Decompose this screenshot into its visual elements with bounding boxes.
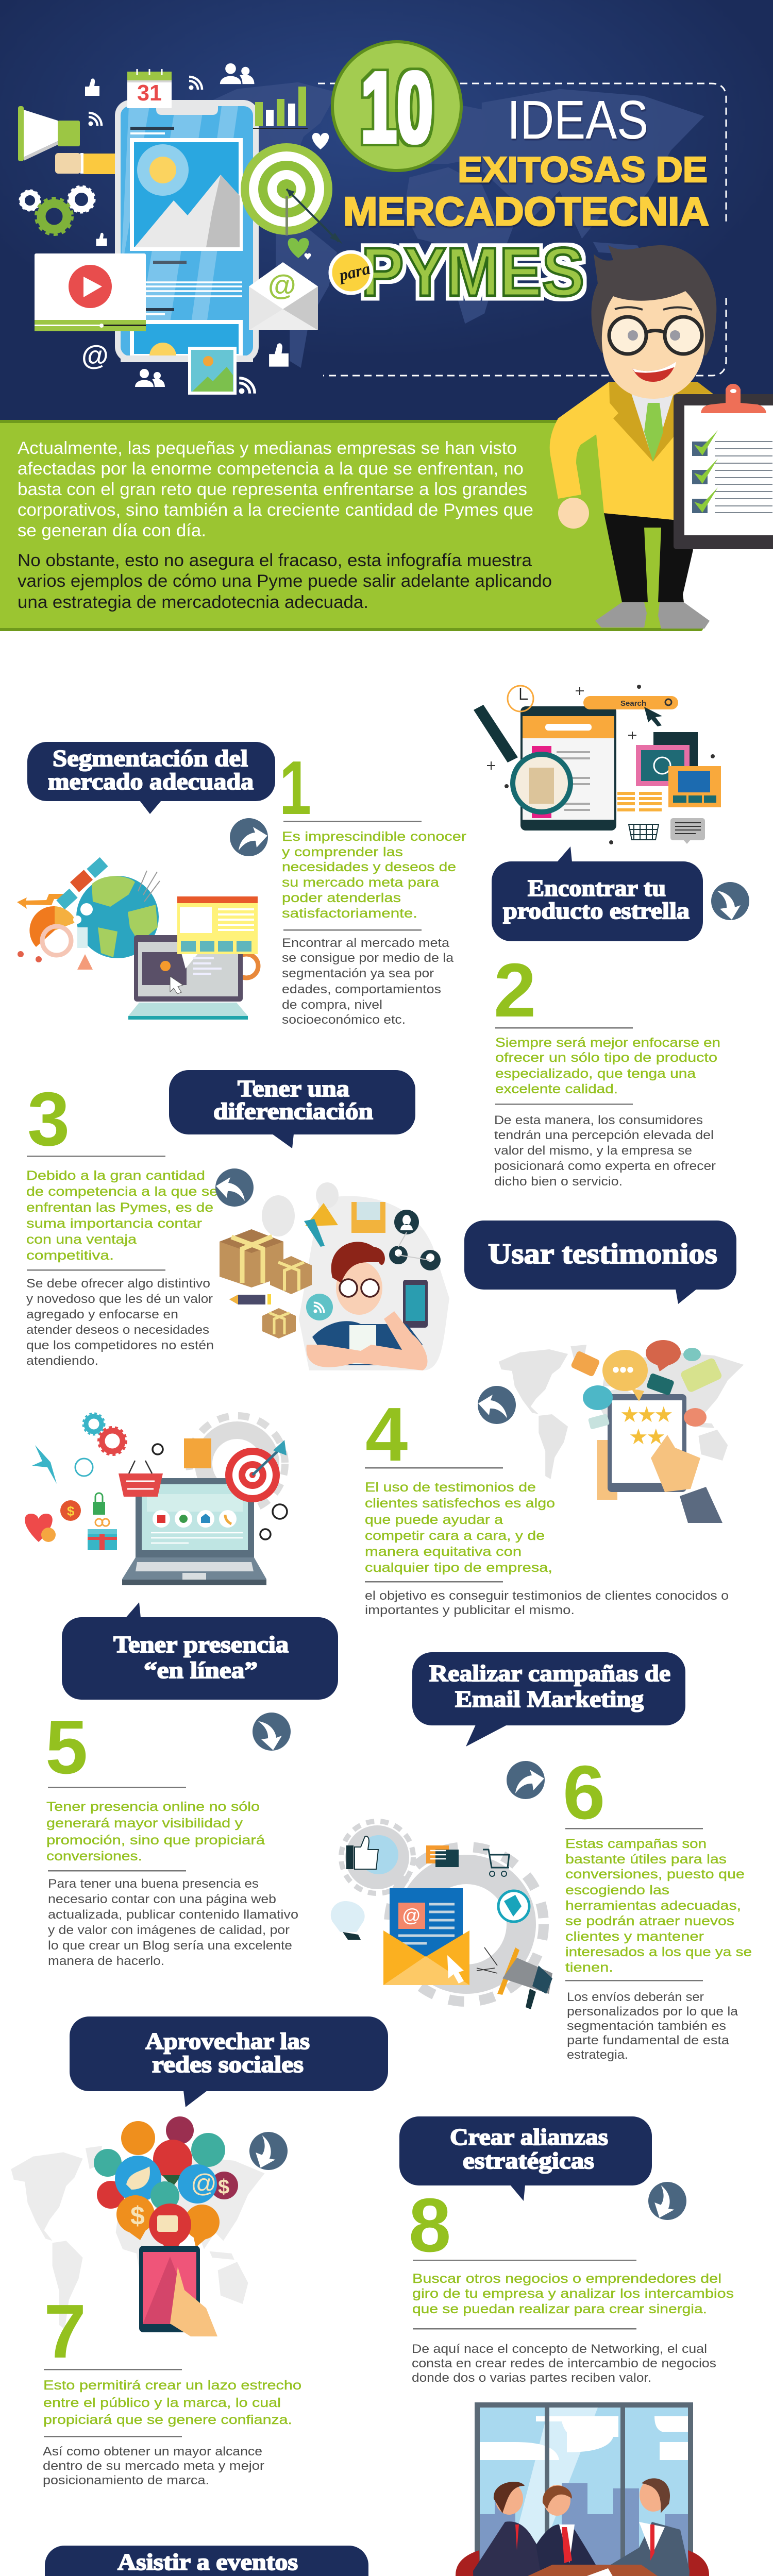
highlight text: suma importancia contar <box>26 1216 202 1231</box>
highlight text: y comprender las <box>282 845 403 859</box>
body text: que los competidores no estén <box>26 1338 214 1352</box>
number: 7 <box>44 2289 86 2374</box>
arrow <box>711 882 749 920</box>
highlight text: conversiones. <box>46 1849 142 1863</box>
panel: intro <box>0 420 708 631</box>
icon: smartphone <box>115 100 259 362</box>
body text: posicionará como experta en ofrecer <box>494 1159 716 1173</box>
highlight text: El uso de testimonios de <box>365 1480 536 1495</box>
section 5: presencia en linea <box>45 1602 338 1968</box>
highlight text <box>365 1480 555 1575</box>
world map background <box>192 72 704 368</box>
speech bubble: Tener una <box>238 1075 349 1101</box>
body text: se consigue por medio de la <box>282 951 454 965</box>
illustration: social bubbles and tablet: $ <box>218 2176 229 2198</box>
highlight text: escogiendo las <box>565 1883 669 1897</box>
icon: gears <box>20 187 94 234</box>
speech bubble: Crear alianzas <box>450 2124 608 2150</box>
arrow <box>253 1713 291 1751</box>
speech bubble: Usar testimonios <box>488 1238 717 1270</box>
icon: calendar: 31 <box>137 80 162 106</box>
speech bubble <box>70 2016 388 2107</box>
character: man with clipboard <box>550 245 773 629</box>
body text: Para tener una buena presencia es <box>48 1877 259 1891</box>
body text: dentro de su mercado meta y mejor <box>43 2459 264 2473</box>
illustration: email with gears and megaphone: @ <box>402 1905 421 1926</box>
highlight text: manera equitativa con <box>365 1545 522 1559</box>
body text: posicionamiento de marca. <box>43 2473 209 2487</box>
illustration: email with gears and megaphone <box>331 1821 552 2009</box>
highlight text: interesados a los que ya se <box>565 1945 752 1959</box>
body text: valor del mismo, y la empresa se <box>494 1144 692 1158</box>
intro paragraph 1: Actualmente, las pequeñas y medianas empresas se han visto <box>18 438 517 458</box>
illustration: social bubbles and tablet: $ <box>130 2201 145 2230</box>
speech bubble: producto estrella <box>503 897 690 924</box>
icons: social small <box>81 63 289 394</box>
illustration: world map, tablet and chat bubbles: ★ <box>637 1402 657 1427</box>
intro paragraph 2: varios ejemplos de cómo una Pyme puede salir adelante aplicando <box>18 571 552 591</box>
illustration: tablet and magnifier: Search <box>620 699 646 708</box>
body text <box>365 1589 729 1617</box>
body text: importantes y publicitar el mismo. <box>365 1603 575 1617</box>
header panel <box>0 0 773 422</box>
highlight text: que se puedan realizar para crear sinergia. <box>412 2302 707 2316</box>
illustration: laptop with marketing icons: $ <box>67 1503 75 1519</box>
title: mercadotecnia: MERCADOTECNIA <box>343 189 709 234</box>
highlight text: promoción, sino que propiciará <box>46 1833 265 1848</box>
illustration: world map, tablet and chat bubbles: ★ <box>620 1402 640 1427</box>
highlight text: Debido a la gran cantidad <box>26 1168 205 1183</box>
highlight text: su mercado meta para <box>282 875 439 890</box>
body text: atendiendo. <box>26 1354 98 1368</box>
highlight text: giro de tu empresa y analizar los intercambios <box>412 2286 734 2301</box>
highlight text: Esto permitirá crear un lazo estrecho <box>43 2378 301 2393</box>
section 4: testimonios <box>365 1221 744 1617</box>
section 7: redes sociales <box>11 2016 388 2487</box>
highlight text: herramientas adecuadas, <box>565 1899 741 1913</box>
body text: lo que crear un Blog sería una excelente <box>48 1939 292 1953</box>
body text: Los envíos deberán ser <box>567 1990 704 2004</box>
body text: edades, comportamientos <box>282 982 441 996</box>
highlight text: enfrentan las Pymes, es de <box>26 1200 213 1215</box>
body text <box>282 936 454 1027</box>
number: 6 <box>563 1750 605 1835</box>
illustration: tablet and magnifier <box>474 685 721 844</box>
highlight text: especializado, que tenga una <box>495 1066 696 1081</box>
body text <box>48 1877 298 1968</box>
highlight text: cualquier tipo de empresa, <box>365 1561 552 1575</box>
speech bubble <box>412 1652 685 1747</box>
highlight text: Estas campañas son <box>565 1837 707 1851</box>
illustration: world map, tablet and chat bubbles: ••• <box>612 1359 634 1381</box>
body text: agregado y enfocarse en <box>26 1308 178 1321</box>
speech bubble: Email Marketing <box>455 1686 644 1712</box>
number: 2 <box>494 948 536 1033</box>
icon: bar chart <box>253 87 308 129</box>
highlight text: satisfactoriamente. <box>282 906 417 921</box>
highlight text: conversiones, puesto que <box>565 1867 745 1882</box>
speech bubble: Asistir a eventos <box>117 2549 298 2575</box>
body text: Encontrar al mercado meta <box>282 936 450 950</box>
highlight text <box>26 1168 218 1263</box>
highlight text <box>46 1800 265 1863</box>
body text: el objetivo es conseguir testimonios de clientes conocidos o <box>365 1589 729 1603</box>
section 2: producto estrella <box>474 685 749 1189</box>
arrow <box>215 1168 254 1207</box>
speech bubble: estratégicas <box>463 2147 594 2174</box>
title: exitosas de: EXITOSAS DE <box>458 149 708 190</box>
illustration: social bubbles and tablet <box>11 2116 265 2336</box>
speech bubble <box>62 1602 338 1700</box>
body text: De aquí nace el concepto de Networking, el cual <box>412 2342 707 2356</box>
speech bubble <box>27 742 275 814</box>
highlight text: se podrán atraer nuevos <box>565 1914 734 1928</box>
highlight text: Tener presencia online no sólo <box>46 1800 260 1814</box>
highlight text: Es imprescindible conocer <box>282 829 466 844</box>
intro paragraph 2: una estrategia de mercadotecnia adecuada. <box>18 592 368 612</box>
icon: picture <box>188 347 237 395</box>
number: 1 <box>279 745 311 831</box>
body text <box>26 1277 214 1368</box>
body text <box>494 1113 716 1189</box>
highlight text: tienen. <box>565 1960 613 1975</box>
body text: dicho bien o servicio. <box>494 1175 623 1189</box>
title circle with 10 <box>332 42 461 171</box>
highlight text: entre el público y la marca, lo cual <box>43 2396 281 2410</box>
body text: parte fundamental de esta <box>567 2033 730 2047</box>
arrow <box>478 1386 516 1424</box>
icon: megaphone with hand <box>18 106 115 174</box>
highlight text: competir cara a cara, y de <box>365 1529 545 1543</box>
highlight text: necesidades y deseos de <box>282 860 456 874</box>
speech bubble: diferenciación <box>213 1098 373 1124</box>
highlight text: Buscar otros negocios o emprendedores del <box>412 2272 721 2286</box>
icon: calendar <box>127 69 172 108</box>
section 6: email marketing <box>331 1652 752 2062</box>
illustration: social bubbles and tablet: @ <box>191 2169 217 2198</box>
highlight text: clientes y mantener <box>565 1929 704 1944</box>
body text: actualizada, publicar contenido llamativo <box>48 1908 298 1922</box>
number: 5 <box>45 1705 88 1790</box>
body text: tendrán una percepción elevada del <box>494 1128 714 1142</box>
highlight text: con una ventaja <box>26 1232 137 1247</box>
highlight text: bastante útiles para las <box>565 1852 727 1867</box>
body text: Así como obtener un mayor alcance <box>43 2445 262 2459</box>
dashed frame <box>318 83 726 376</box>
highlight text <box>412 2272 734 2316</box>
section 8: alianzas <box>399 2116 734 2576</box>
body text: y novedoso que les dé un valor <box>26 1292 213 1306</box>
body text: De esta manera, los consumidores <box>494 1113 703 1127</box>
speech bubble <box>492 846 703 941</box>
highlight text: Siempre será mejor enfocarse en <box>495 1036 720 1050</box>
section 9: eventos <box>40 2546 368 2576</box>
highlight text <box>282 829 466 921</box>
intro paragraph 1: basta con el gran reto que representa enfrentarse a los grandes <box>18 480 527 499</box>
highlight text <box>495 1036 720 1096</box>
body text: personalizados por lo que la <box>567 2005 738 2019</box>
speech bubble: Segmentación del <box>53 745 248 771</box>
icon: envelope: @ <box>268 268 296 301</box>
body text: donde dos o varias partes reciben valor. <box>412 2371 651 2385</box>
highlight text <box>43 2378 301 2427</box>
speech bubble <box>399 2116 652 2201</box>
speech bubble: Realizar campañas de <box>429 1660 670 1686</box>
illustration: laptop with marketing icons <box>25 1413 287 1585</box>
clipboard <box>674 384 773 549</box>
icon: hearts <box>288 133 329 260</box>
speech bubble: redes sociales <box>152 2051 304 2077</box>
arrow <box>242 2125 295 2177</box>
intro paragraph 1: se generan día con día. <box>18 521 206 540</box>
icon: target with arrow <box>241 143 343 244</box>
illustration: globe and laptop <box>17 857 258 1020</box>
highlight text: generará mayor visibilidad y <box>46 1816 243 1831</box>
illustration: world map, tablet and chat bubbles <box>499 1340 744 1523</box>
highlight text: propiciará que se genere confianza. <box>43 2413 292 2427</box>
body text: atender deseos o necesidades <box>26 1323 209 1337</box>
body text: Se debe ofrecer algo distintivo <box>26 1277 210 1291</box>
title: ideas: IDEAS <box>507 90 648 150</box>
speech bubble: “en línea” <box>144 1657 258 1683</box>
intro paragraph 1: corporativos, sino también a la creciente cantidad de Pymes que <box>18 500 533 520</box>
body text <box>412 2342 716 2385</box>
arrow <box>230 818 268 856</box>
arrow <box>507 1761 545 1799</box>
highlight text: poder atenderlas <box>282 891 401 905</box>
section 1: segmentation <box>17 742 466 1027</box>
badge: para: para <box>335 259 372 285</box>
title circle with 10: 10 <box>361 51 433 164</box>
speech bubble <box>169 1070 415 1148</box>
highlight text <box>565 1837 752 1975</box>
speech bubble: mercado adecuada <box>48 768 254 794</box>
intro paragraph 1: afectadas por la enorme competencia a la que se enfrentan, no <box>18 459 524 479</box>
body text: segmentación también es <box>567 2019 726 2033</box>
highlight text: que puede ayudar a <box>365 1513 503 1527</box>
body text <box>567 1990 738 2062</box>
speech bubble: Tener presencia <box>113 1631 289 1657</box>
section 3: diferenciacion <box>26 1070 449 1370</box>
number: 3 <box>27 1077 70 1162</box>
highlight text: ofrecer un sólo tipo de producto <box>495 1050 717 1065</box>
highlight text: excelente calidad. <box>495 1082 618 1096</box>
title: pymes: PYMES <box>361 234 584 311</box>
intro paragraph 2: No obstante, esto no asegura el fracaso, esta infografía muestra <box>18 551 532 570</box>
speech bubble <box>45 2546 368 2576</box>
body text: necesario contar con una página web <box>48 1892 276 1906</box>
number: 8 <box>409 2183 451 2268</box>
highlight text: competitiva. <box>26 1248 114 1263</box>
body text: y de valor con imágenes de calidad, por <box>48 1923 290 1937</box>
badge: para <box>330 252 372 293</box>
illustration: world map, tablet and chat bubbles: ★ <box>646 1424 666 1449</box>
body text: de compra, nivel <box>282 998 382 1012</box>
illustration: world map, tablet and chat bubbles: ★ <box>654 1402 674 1427</box>
speech bubble: Encontrar tu <box>528 875 666 901</box>
body text: estrategia. <box>567 2048 628 2062</box>
number: 4 <box>365 1392 408 1477</box>
icon: envelope <box>249 262 318 330</box>
speech bubble: Aprovechar las <box>145 2028 310 2054</box>
arrow <box>641 2175 694 2227</box>
highlight text: clientes satisfechos es algo <box>365 1496 555 1511</box>
highlight text: de competencia a la que se <box>26 1184 218 1199</box>
illustration: thinking man with boxes <box>220 1182 449 1370</box>
illustration: business meeting <box>456 2402 709 2576</box>
body text: consta en crear redes de intercambio de negocios <box>412 2357 716 2370</box>
icon: video card <box>35 253 146 331</box>
icons: social small: @ <box>81 340 109 371</box>
intro paragraph 2 <box>18 551 552 612</box>
body text: manera de hacerlo. <box>48 1954 164 1968</box>
speech bubble <box>464 1221 736 1304</box>
body text: segmentación ya sea por <box>282 967 434 980</box>
body text <box>43 2445 264 2487</box>
body text: socioeconómico etc. <box>282 1013 406 1027</box>
illustration: world map, tablet and chat bubbles: ★ <box>629 1424 648 1449</box>
intro paragraph 1 <box>18 438 533 540</box>
